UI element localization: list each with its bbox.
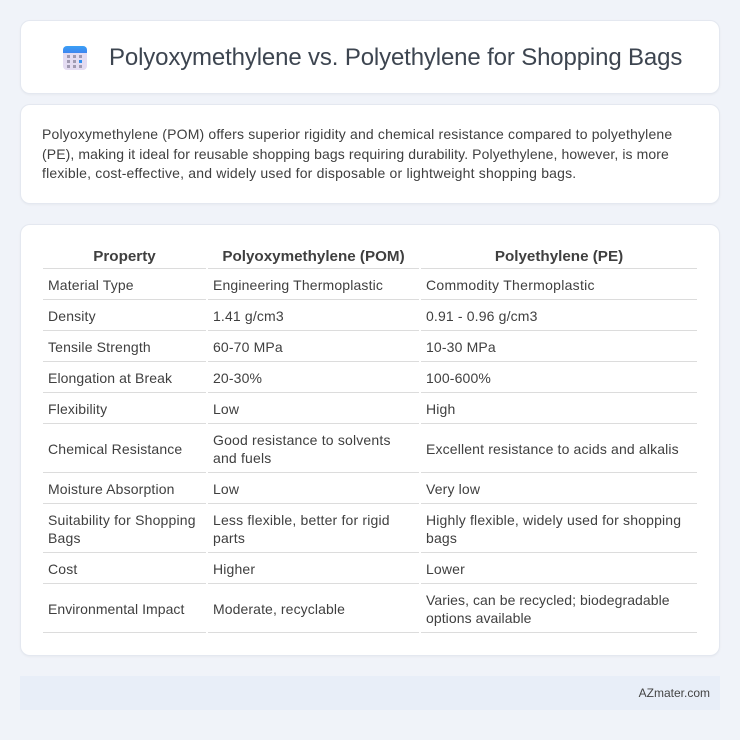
comparison table: and fuels <box>213 450 271 466</box>
header: POM: Polyoxymethylene (POM) <box>222 248 405 265</box>
comparison table: Cost <box>48 561 77 577</box>
comparison table: 0.91 - 0.96 g/cm3 <box>426 308 538 324</box>
comparison table: Low <box>213 401 239 417</box>
comparison table: Bags <box>48 530 81 546</box>
comparison table: Material Type <box>48 277 134 293</box>
comparison table: 10-30 MPa <box>426 339 496 355</box>
comparison table: bags <box>426 530 457 546</box>
comparison table: 1.41 g/cm3 <box>213 308 284 324</box>
comparison table: options available <box>426 610 532 626</box>
comparison table: Moderate, recyclable <box>213 601 345 617</box>
header: PE: Polyethylene (PE) <box>495 248 623 265</box>
comparison table: High <box>426 401 455 417</box>
comparison table: Moisture Absorption <box>48 481 175 497</box>
comparison table: Higher <box>213 561 255 577</box>
header panel <box>20 20 720 94</box>
comparison table: parts <box>213 530 245 546</box>
comparison table: Good resistance to solvents <box>213 432 391 448</box>
comparison table: Highly flexible, widely used for shopping <box>426 512 681 528</box>
comparison table: Varies, can be recycled; biodegradable <box>426 592 670 608</box>
comparison table: Very low <box>426 481 480 497</box>
header: property: Property <box>93 248 156 265</box>
comparison table: Less flexible, better for rigid <box>213 512 390 528</box>
comparison table: Excellent resistance to acids and alkalis <box>426 441 679 457</box>
comparison table: Flexibility <box>48 401 107 417</box>
summary text: Polyoxymethylene (POM) offers superior rigidity and chemical resistance compared to polyethylene <box>42 126 672 142</box>
icon: calendar <box>63 46 87 70</box>
title: Polyoxymethylene vs. Polyethylene for Shopping Bags <box>109 44 682 71</box>
footer credit: AZmater.com <box>639 686 710 700</box>
table panel <box>20 224 720 656</box>
comparison table: Elongation at Break <box>48 370 172 386</box>
comparison table: Engineering Thermoplastic <box>213 277 383 293</box>
summary panel <box>20 104 720 204</box>
comparison table: Suitability for Shopping <box>48 512 196 528</box>
comparison table: Density <box>48 308 96 324</box>
summary text: (PE), making it ideal for reusable shopping bags requiring durability. Polyethylene, however, is more <box>42 146 669 162</box>
comparison table: Lower <box>426 561 465 577</box>
footer bar <box>20 676 720 710</box>
comparison table: Chemical Resistance <box>48 441 182 457</box>
comparison table: Tensile Strength <box>48 339 151 355</box>
comparison table: 60-70 MPa <box>213 339 283 355</box>
summary text: flexible, cost-effective, and widely used for disposable or lightweight shopping bags. <box>42 165 576 181</box>
summary text <box>42 126 672 181</box>
comparison table: Environmental Impact <box>48 601 184 617</box>
comparison table: 100-600% <box>426 370 491 386</box>
comparison table: Low <box>213 481 239 497</box>
comparison table: Commodity Thermoplastic <box>426 277 595 293</box>
comparison table: 20-30% <box>213 370 262 386</box>
